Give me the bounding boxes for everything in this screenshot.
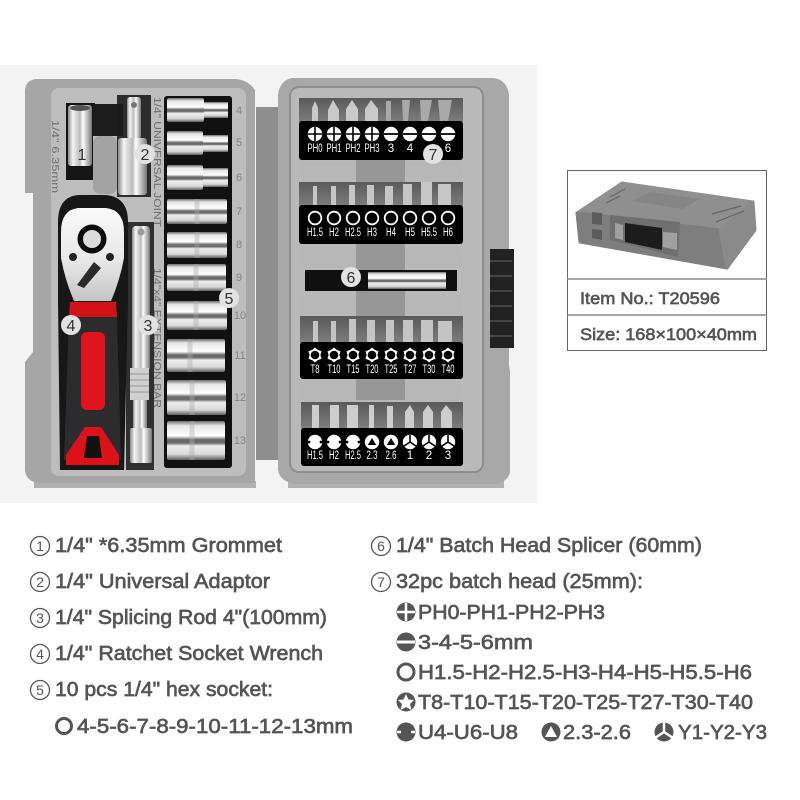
bit row 3: torx: T25 <box>384 364 398 376</box>
item 6: bit splicer <box>305 270 457 291</box>
bit row 2: hex: H2.5 <box>345 227 361 239</box>
triangle sizes: 2.3-2.6 <box>563 722 631 744</box>
bit row 4: U, triangle and Y: 2.6 <box>386 450 396 462</box>
legend left column <box>30 535 353 738</box>
item 1: grommet socket: 1 <box>78 147 87 164</box>
bit row 4: U, triangle and Y: 3 <box>445 450 451 462</box>
badge 2 <box>135 144 155 164</box>
moulded tray lettering <box>49 97 162 408</box>
bit row 2: hex: H5 <box>405 227 415 239</box>
item 1: grommet socket <box>68 105 92 166</box>
slotted sizes: 3-4-5-6mm <box>418 632 533 654</box>
bit row 4: U, triangle and Y: H1.5 <box>307 450 323 462</box>
badge 3 <box>138 315 158 335</box>
bit row 4: U, triangle and Y: 2 <box>426 450 432 462</box>
bit row 3: torx: T20 <box>366 364 378 376</box>
item 4: ratchet wrench <box>58 195 128 470</box>
badge 4: 4 <box>67 318 76 335</box>
bit row 3: torx: T10 <box>328 364 340 376</box>
bit row 4: U, triangle and Y: 1 <box>407 450 413 462</box>
badge 6: 6 <box>347 270 356 287</box>
socket size labels: 12 <box>234 392 246 404</box>
bit row 2: hex: H3 <box>367 227 377 239</box>
bit row 1: phillips and slotted: 4 <box>407 143 414 155</box>
socket size labels: 4 <box>236 105 242 117</box>
size: Size: 168×100×40mm <box>580 325 757 344</box>
bit row 4: U, triangle and Y <box>301 402 463 466</box>
torx sizes: T8-T10-T15-T20-T25-T27-T30-T40 <box>418 692 753 714</box>
legend item 7: 7 <box>377 574 385 590</box>
bit row 1: phillips and slotted: PH0 <box>308 143 322 155</box>
socket size labels: 5 <box>236 137 242 149</box>
bit row 2: hex: H2 <box>329 227 339 239</box>
badge 6 <box>341 267 361 287</box>
hex sizes: H1.5-H2-H2.5-H3-H4-H5-H5.5-H6 <box>418 662 752 684</box>
bit row 3: torx <box>300 316 463 379</box>
Y sizes: Y1-Y2-Y3 <box>678 722 767 744</box>
socket size labels: 9 <box>236 272 242 284</box>
bit row 3: torx: T40 <box>442 364 454 376</box>
bit row 2: hex: H6 <box>443 227 453 239</box>
badge 7: 7 <box>429 147 438 164</box>
case spine <box>256 107 279 460</box>
bit row 4: U, triangle and Y: 2.3 <box>366 450 378 462</box>
phillips sizes: PH0-PH1-PH2-PH3 <box>418 602 605 624</box>
bit row 1: phillips and slotted: PH1 <box>326 143 342 155</box>
moulded tray lettering: 1/4" 6.35mm <box>49 120 60 193</box>
legend item 5: 10 pcs 1/4" hex socket: <box>55 679 273 701</box>
legend item 6: 1/4" Batch Head Splicer (60mm) <box>396 535 702 557</box>
badge 5: 5 <box>225 291 234 308</box>
bit row 3: torx: T8 <box>310 364 320 376</box>
legend item 6: 6 <box>377 538 385 554</box>
socket sizes: 4-5-6-7-8-9-10-11-12-13mm <box>77 716 353 738</box>
item 5: hex sockets <box>167 98 228 460</box>
product info box <box>567 170 767 350</box>
bit row 2: hex: H5.5 <box>421 227 437 239</box>
legend item 1: 1/4" *6.35mm Grommet <box>55 535 282 557</box>
badge 2: 2 <box>141 147 150 164</box>
moulded tray lettering: 1/4" UNIVERSAL JOINT <box>151 97 162 227</box>
right case tray <box>278 78 510 488</box>
socket size labels: 13 <box>234 435 246 447</box>
legend item 3: 3 <box>36 610 44 626</box>
bit row 3: torx: T30 <box>422 364 436 376</box>
bit row 4: U, triangle and Y: H2 <box>329 450 339 462</box>
triangle sizes <box>542 722 631 744</box>
legend right column <box>372 535 767 744</box>
case latch <box>490 249 514 348</box>
badge 4 <box>61 315 81 335</box>
legend item 4: 1/4" Ratchet Socket Wrench <box>55 643 323 665</box>
closed case illustration <box>577 183 755 268</box>
bit row 2: hex: H1.5 <box>307 227 323 239</box>
socket size labels: 11 <box>234 350 246 362</box>
item 2: universal adaptor <box>118 97 147 195</box>
bit row 4: U, triangle and Y: H2.5 <box>345 450 361 462</box>
moulded tray lettering: 1/4"x4" EXTENSION BAR <box>151 268 162 408</box>
legend item 4: 4 <box>36 646 44 662</box>
legend item 2: 1/4" Universal Adaptor <box>55 571 270 593</box>
bit row 2: hex: H4 <box>386 227 396 239</box>
bit row 3: torx: T15 <box>346 364 360 376</box>
badge 7 <box>423 144 443 164</box>
legend item 5: 5 <box>36 682 44 698</box>
bit row 1: phillips and slotted: PH3 <box>364 143 380 155</box>
socket size labels: 6 <box>236 172 242 184</box>
bit row 3: torx: T27 <box>404 364 416 376</box>
socket size labels: 7 <box>236 206 242 218</box>
badge 3: 3 <box>144 318 153 335</box>
item number: Item No.: T20596 <box>580 289 720 308</box>
legend item 1: 1 <box>36 538 44 554</box>
legend item 3: 1/4" Splicing Rod 4"(100mm) <box>55 607 327 629</box>
legend item 7: 32pc batch head (25mm): <box>396 571 643 593</box>
U sizes: U4-U6-U8 <box>418 722 518 744</box>
socket size labels <box>234 105 246 447</box>
item 3: splicing rod <box>130 226 152 463</box>
bit row 1: phillips and slotted: PH2 <box>346 143 360 155</box>
socket size labels: 10 <box>234 310 246 322</box>
socket size labels: 8 <box>236 239 242 251</box>
badge 5 <box>219 288 239 308</box>
bit row 1: phillips and slotted <box>299 98 463 160</box>
bit row 1: phillips and slotted: 6 <box>445 143 451 155</box>
bit row 2: hex <box>299 182 463 244</box>
legend item 2: 2 <box>36 574 44 590</box>
bit row 1: phillips and slotted: 3 <box>388 143 394 155</box>
photo backdrop <box>0 65 537 503</box>
left case tray <box>25 79 256 488</box>
